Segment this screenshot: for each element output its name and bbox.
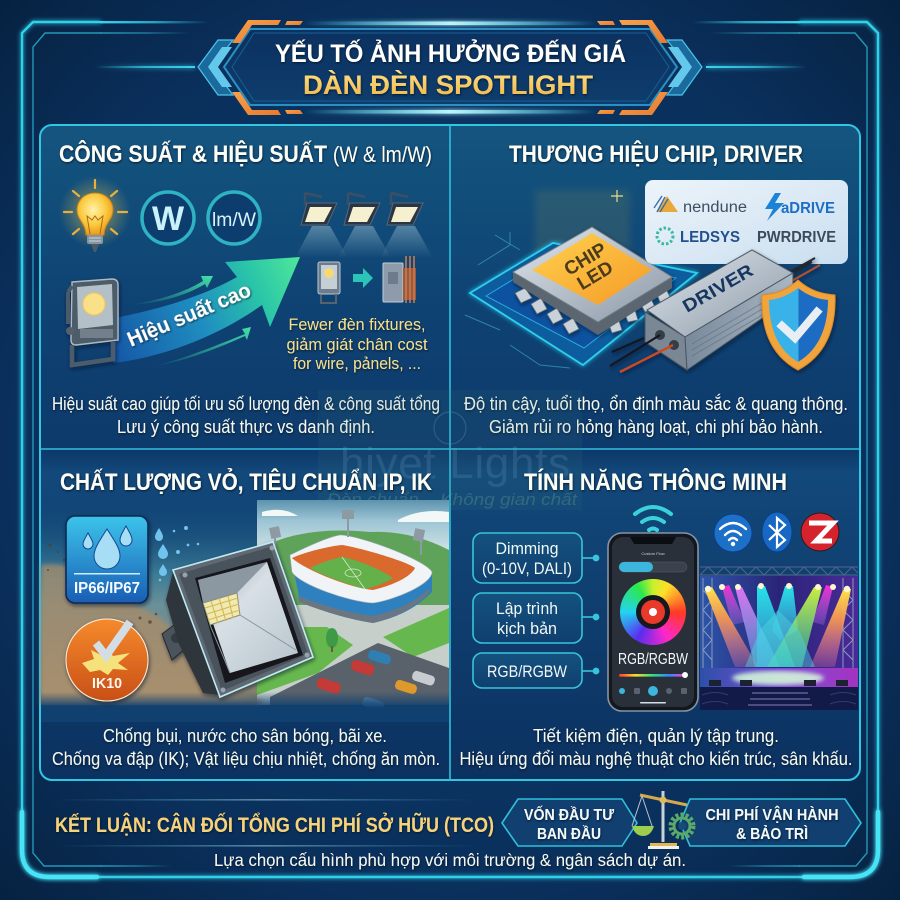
body text: Tiết kiệm điện, quản lý tập trung. xyxy=(533,726,779,746)
panel: thương hiệu chip, driver xyxy=(464,140,848,437)
icon: wifi signal xyxy=(635,507,671,530)
driver box xyxy=(610,250,820,372)
body text: Hiệu ứng đổi màu nghệ thuật cho kiến trúc, sân khấu. xyxy=(460,749,852,769)
body text: Hiệu suất cao giúp tối ưu số lượng đèn & công suất tổng xyxy=(52,394,440,414)
icons: wifi bluetooth zigbee xyxy=(714,512,839,552)
badge: IK10: IK10 xyxy=(92,675,122,692)
icon: W circle xyxy=(142,192,194,244)
note: fewer fixtures: for wire, pảnels, ... xyxy=(293,355,421,373)
opex tag: & BẢO TRÌ xyxy=(736,826,808,843)
circuit board xyxy=(465,190,697,368)
opex tag: CHI PHÍ VẬN HÀNH xyxy=(706,806,838,824)
capex tag xyxy=(502,799,637,846)
brand logos box: PWRDRIVE xyxy=(757,229,836,246)
feature: rgb: RGB/RGBW xyxy=(487,663,567,681)
panel: tính năng thông minh xyxy=(460,468,858,769)
icon: lm/W circle xyxy=(208,192,260,244)
panel: chất lượng vỏ, tiêu chuẩn xyxy=(41,467,449,769)
feature: dimming: Dimming xyxy=(496,540,558,558)
badge: IP66/IP67 xyxy=(66,516,148,603)
note: fewer fixtures: Fewer đèn fixtures, xyxy=(288,316,426,334)
phone app: Custom Flow xyxy=(641,551,665,556)
capex tag: VỐN ĐẦU TƯ xyxy=(524,806,614,824)
feature: scripting: Lập trình xyxy=(496,600,558,618)
feature: scripting xyxy=(473,593,599,643)
body text xyxy=(52,394,440,437)
phone app xyxy=(608,533,698,711)
icon: large floodlight xyxy=(66,279,118,365)
chip LED xyxy=(513,227,672,335)
opex tag xyxy=(680,799,861,846)
icon: W circle: W xyxy=(152,200,185,238)
icon: three floodlights xyxy=(295,193,433,258)
heading: CÔNG SUẤT & HIỆU SUẤT (W & lm/W) xyxy=(59,140,432,168)
chip LED: CHIP xyxy=(561,239,611,280)
watermark xyxy=(318,390,582,510)
heading: TÍNH NĂNG THÔNG MINH xyxy=(524,468,787,496)
heading: CHẤT LƯỢNG VỎ, TIÊU CHUẨN IP, IK xyxy=(60,467,433,496)
watermark: Đèn chuẩn – Không gian chất xyxy=(327,490,578,509)
feature: dimming xyxy=(473,533,599,583)
color wheel xyxy=(620,579,686,645)
title line two: DÀN ĐÈN SPOTLIGHT xyxy=(303,69,594,100)
dust cloud xyxy=(41,544,449,722)
feature: rgb xyxy=(473,653,599,688)
brand logos box: aDRIVE xyxy=(781,200,835,217)
body text: Chống bụi, nước cho sân bóng, bãi xe. xyxy=(103,726,387,746)
capex tag: BAN ĐẦU xyxy=(537,826,601,843)
feature: dimming: (0-10V, DALI) xyxy=(482,560,572,578)
icon: shield xyxy=(762,280,835,370)
left weather backdrop xyxy=(41,505,257,705)
icon: lm/W circle: lm/W xyxy=(212,210,256,231)
icon: rugged floodlight xyxy=(162,542,313,697)
badge: IP66/IP67: IP66/IP67 xyxy=(74,580,140,597)
phone app: RGB/RGBW xyxy=(618,651,689,668)
water droplets xyxy=(155,526,199,581)
body text xyxy=(460,726,852,769)
watermark: hiyet Lights xyxy=(340,439,570,488)
brand logos box: LEDSYS xyxy=(680,229,740,246)
body text: Độ tin cậy, tuổi thọ, ổn định màu sắc & quang thông. xyxy=(464,393,848,414)
title line one: YẾU TỐ ẢNH HƯỞNG ĐẾN GIÁ xyxy=(275,38,626,68)
chip LED: LED xyxy=(574,257,617,295)
brand logos box: nendune xyxy=(683,199,747,216)
conclusion heading: KẾT LUẬN: CÂN ĐỐI TỔNG CHI PHÍ SỞ HỮU (TCO) xyxy=(55,813,494,837)
note: fewer fixtures: giảm giát chân cost xyxy=(286,336,428,354)
body text: Chống va đập (IK); Vật liệu chịu nhiệt, chống ăn mòn. xyxy=(52,749,440,769)
heading: THƯƠNG HIỆU CHIP, DRIVER xyxy=(509,140,803,168)
stadium scene xyxy=(257,500,449,712)
conclusion strip xyxy=(55,791,861,870)
label on arrow: Hiệu suất cao xyxy=(124,279,254,352)
note: fewer fixtures xyxy=(286,316,428,373)
icon: balance scale xyxy=(632,791,693,849)
body text xyxy=(52,726,440,769)
icon: fixture to electrical panel xyxy=(318,256,416,303)
arrow: high efficiency xyxy=(113,257,300,367)
feature: scripting: kịch bản xyxy=(497,620,557,638)
icon: light bulb xyxy=(59,176,131,252)
badge: IK10 xyxy=(66,619,148,701)
brand logos box xyxy=(645,180,848,264)
main panel grid xyxy=(40,125,860,780)
stage scene xyxy=(700,567,858,710)
body text: Lưu ý công suất thực vs danh định. xyxy=(117,417,375,437)
conclusion note: Lựa chọn cấu hình phù hợp với môi trường & ngân sách dự án. xyxy=(214,850,686,870)
title banner xyxy=(95,20,806,115)
panel: công suất và hiệu suất xyxy=(52,140,440,437)
body text xyxy=(464,393,848,437)
driver box: DRIVER xyxy=(679,260,757,316)
body text: Giảm rủi ro hỏng hàng loạt, chi phí bảo hành. xyxy=(489,417,823,437)
